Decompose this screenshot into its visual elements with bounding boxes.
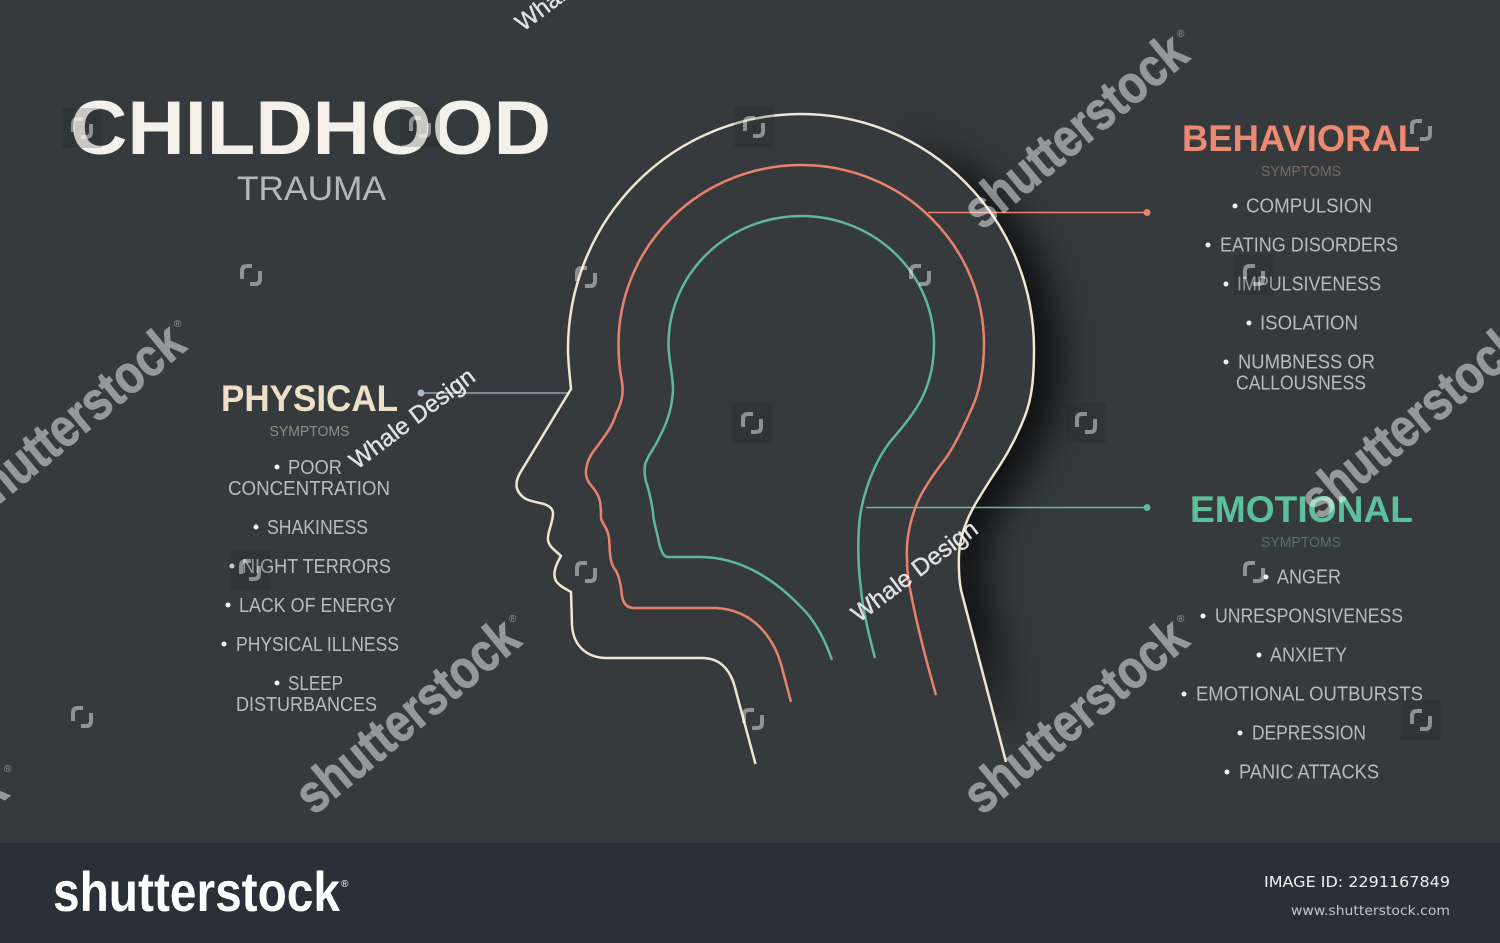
connector: behavioral: [928, 209, 1150, 216]
footer image id: IMAGE ID: 2291167849: [1264, 873, 1450, 891]
footer logo: shutterstock: [53, 860, 341, 923]
list: emotional symptoms: PANIC ATTACKS: [1239, 762, 1379, 784]
subheading: symptoms: SYMPTOMS: [1261, 163, 1341, 180]
list: physical symptoms: [222, 457, 399, 716]
subtitle: trauma: TRAUMA: [237, 170, 386, 208]
list: emotional symptoms: ANGER: [1277, 566, 1341, 588]
list: emotional symptoms: DEPRESSION: [1252, 722, 1366, 744]
list: physical symptoms: POOR: [288, 457, 342, 479]
head profile outlines: [516, 114, 1034, 764]
head interior: [516, 114, 1034, 764]
watermark text: shutterstock: [283, 606, 531, 825]
watermark text: ®: [1177, 614, 1185, 625]
list: emotional symptoms: EMOTIONAL OUTBURSTS: [1196, 684, 1423, 706]
list: emotional symptoms: [1182, 566, 1423, 784]
watermark text: ®: [4, 764, 12, 775]
heading: behavioral: BEHAVIORAL: [1182, 118, 1420, 159]
outline: middle coral head: [586, 165, 984, 702]
list: physical symptoms: LACK OF ENERGY: [239, 595, 396, 617]
heading: emotional: EMOTIONAL: [1190, 489, 1413, 530]
list: behavioral symptoms: COMPULSION: [1246, 196, 1372, 218]
connector: emotional: [866, 504, 1150, 511]
list: physical symptoms: SLEEP: [288, 673, 343, 695]
footer bar: [0, 843, 1500, 943]
outline: outer cream head: [516, 114, 1034, 764]
connector: physical: [418, 390, 570, 396]
head shadow: [918, 141, 1076, 720]
panel: physical symptoms: [221, 378, 399, 716]
panel: behavioral symptoms: [1182, 118, 1420, 394]
subheading: symptoms: SYMPTOMS: [270, 423, 350, 440]
heading: physical: PHYSICAL: [221, 378, 398, 419]
panel: emotional symptoms: [1182, 489, 1423, 784]
list: behavioral symptoms: ISOLATION: [1260, 312, 1358, 334]
list: behavioral symptoms: EATING DISORDERS: [1220, 234, 1398, 256]
subheading: symptoms: SYMPTOMS: [1261, 534, 1341, 551]
list: behavioral symptoms: NUMBNESS OR: [1238, 352, 1375, 374]
list: physical symptoms: DISTURBANCES: [236, 694, 377, 716]
watermark text: ®: [1177, 29, 1185, 40]
watermark text: ®: [174, 319, 182, 330]
watermark text: ®: [509, 614, 517, 625]
footer url: www.shutterstock.com: [1291, 904, 1450, 919]
list: physical symptoms: SHAKINESS: [267, 517, 368, 539]
list: behavioral symptoms: CALLOUSNESS: [1236, 372, 1366, 394]
list: behavioral symptoms: IMPULSIVENESS: [1237, 274, 1381, 296]
title: childhood: CHILDHOOD: [70, 86, 551, 171]
list: emotional symptoms: UNRESPONSIVENESS: [1215, 606, 1403, 628]
list: physical symptoms: CONCENTRATION: [228, 478, 390, 500]
watermark text: Whale Design: [344, 363, 480, 475]
list: physical symptoms: PHYSICAL ILLNESS: [236, 634, 399, 656]
watermark text: Whale Design: [846, 515, 983, 628]
list: emotional symptoms: ANXIETY: [1270, 644, 1347, 666]
watermark text: shutterstock: [951, 606, 1199, 825]
list: physical symptoms: NIGHT TERRORS: [242, 556, 391, 578]
outline: inner green head: [645, 216, 934, 660]
list: behavioral symptoms: [1206, 196, 1398, 394]
title: [70, 86, 551, 208]
watermark icons: [62, 107, 1441, 740]
footer logo registered mark: ®: [341, 879, 349, 890]
